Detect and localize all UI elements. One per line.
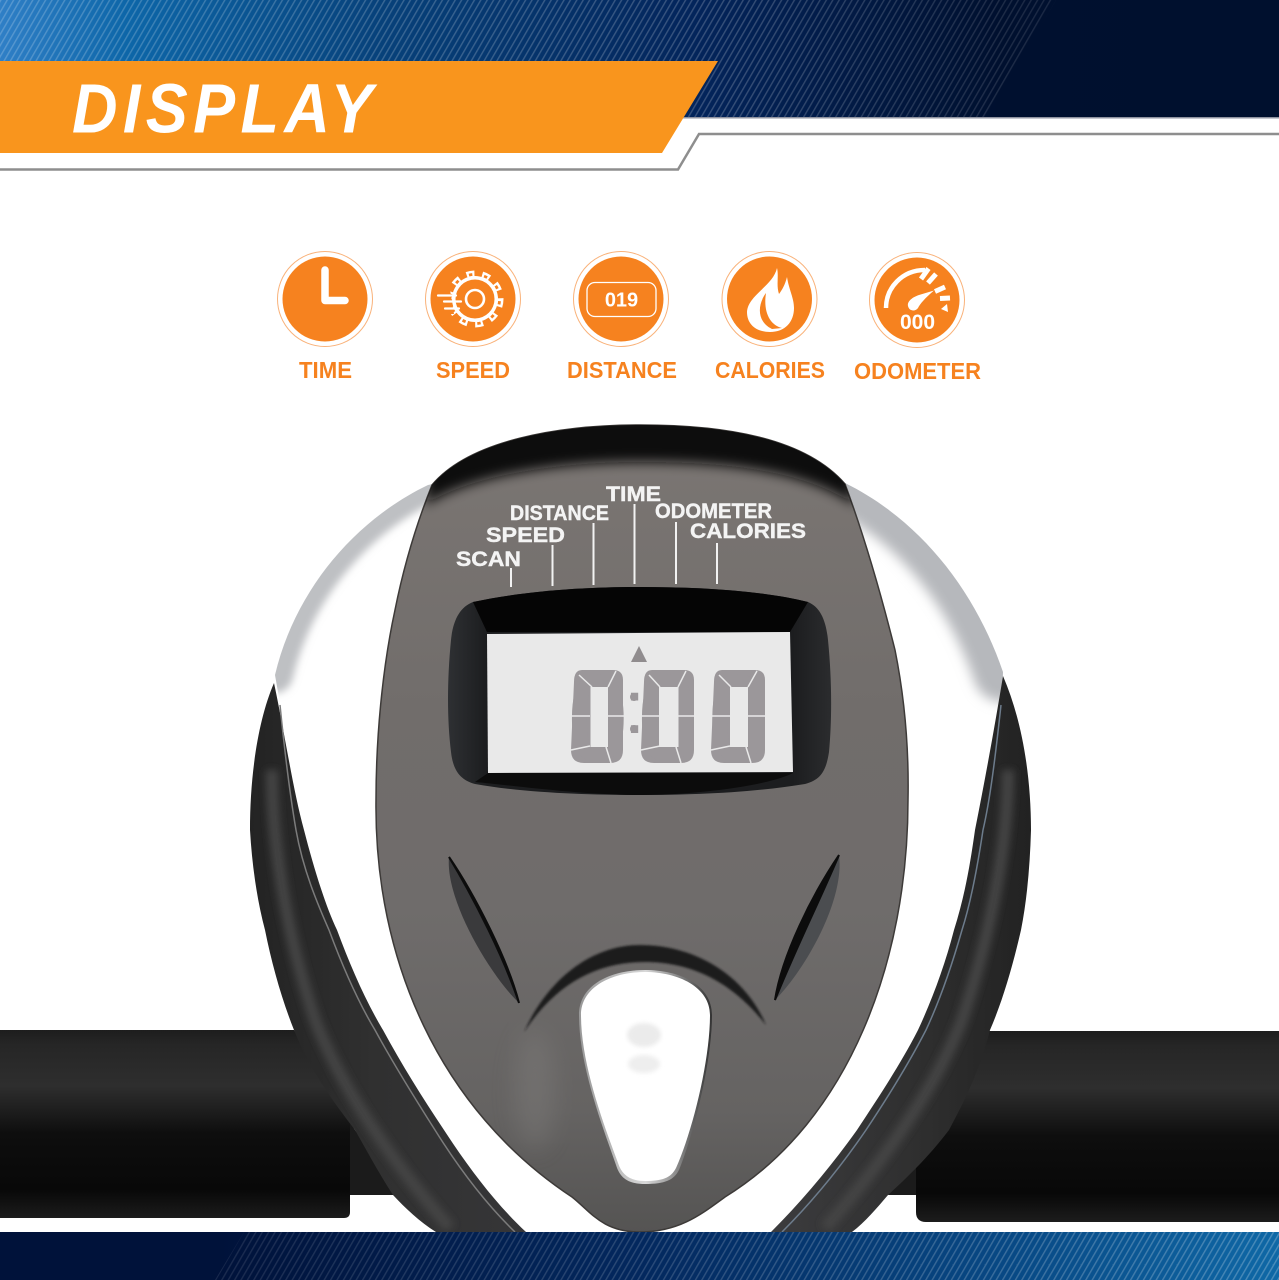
LCD readout: :	[624, 665, 645, 750]
icon: time	[278, 252, 372, 346]
label: TIME: TIME	[299, 357, 352, 383]
LCD indicator	[631, 646, 647, 662]
mode labels: DISTANCE	[510, 502, 609, 525]
header outline rule	[0, 134, 1279, 170]
icon: distance	[574, 252, 668, 346]
LCD readout	[568, 649, 769, 789]
top banner	[0, 0, 1279, 118]
handlebar: left	[0, 1030, 410, 1218]
button arch	[524, 945, 766, 1032]
LCD readout: 0	[568, 649, 628, 789]
console housing	[250, 415, 1031, 1232]
digit counters and segment gaps	[590, 687, 748, 747]
LCD screen	[487, 632, 793, 773]
digit block 1	[571, 670, 623, 763]
left grip	[250, 683, 526, 1232]
heading banner	[0, 61, 718, 153]
digit block 2	[641, 670, 694, 763]
mode labels: CALORIES	[690, 520, 806, 543]
bottom banner	[0, 1232, 1279, 1280]
left slot	[449, 857, 519, 1003]
soft highlight below arch	[524, 1054, 546, 1134]
mode labels	[456, 483, 806, 571]
handlebar: right	[870, 1031, 1279, 1222]
heading: DISPLAY: DISPLAY	[72, 70, 378, 148]
LCD readout: 0	[638, 649, 698, 789]
LCD bezel	[448, 587, 831, 795]
LCD readout: 0	[708, 649, 769, 789]
label: DISTANCE: DISTANCE	[567, 357, 677, 383]
tick lines	[511, 504, 717, 587]
icon: odometer	[870, 252, 964, 348]
label: CALORIES: CALORIES	[715, 357, 825, 383]
icon: speed	[426, 252, 520, 346]
grey panel	[376, 425, 908, 1232]
readout: 000: 000	[900, 311, 935, 334]
right slot	[775, 855, 840, 1000]
icon: calories	[722, 252, 817, 346]
white housing base	[250, 483, 1031, 1232]
top black cap	[425, 415, 855, 505]
centre button	[579, 970, 712, 1184]
mode labels: SCAN	[456, 548, 521, 571]
mode labels: ODOMETER	[655, 500, 772, 523]
label: ODOMETER: ODOMETER	[854, 358, 981, 384]
label: SPEED: SPEED	[436, 357, 510, 383]
mode labels: SPEED	[486, 524, 565, 547]
mode labels: TIME	[606, 483, 661, 506]
readout: 019: 019	[605, 290, 638, 312]
right grip	[771, 676, 1031, 1232]
silver rim	[275, 483, 1003, 675]
digit block 3	[711, 670, 765, 763]
